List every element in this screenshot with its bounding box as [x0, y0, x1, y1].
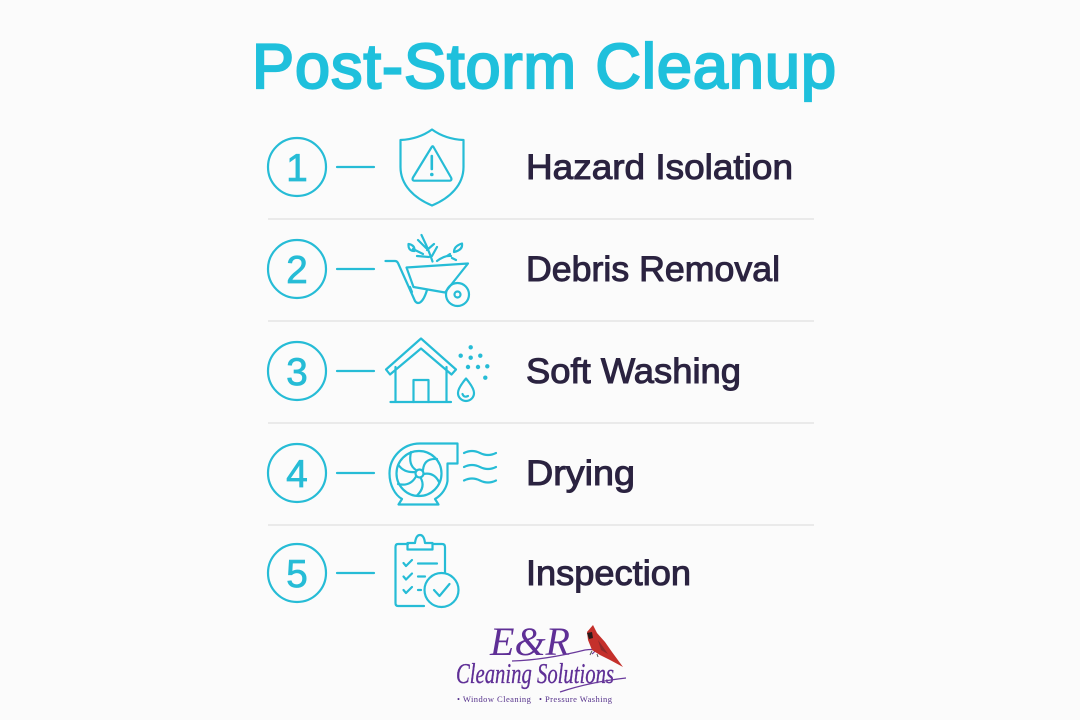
step 1: hazard isolation: 1: [286, 147, 308, 190]
label: Soft Washing: Soft Washing: [526, 352, 741, 391]
step 4: drying: 4: [286, 453, 308, 496]
label: Debris Removal: Debris Removal: [526, 250, 780, 289]
logo: E&R Cleaning Solutions: [456, 619, 626, 704]
step 3: soft washing: 3: [286, 351, 308, 394]
logo wordmark: [456, 619, 614, 690]
logo services line: • Window Cleaning • Pressure Washing: [457, 694, 613, 704]
logo wordmark: E&R: [489, 619, 570, 664]
icon: wheelbarrow with debris: [386, 235, 469, 306]
step 5: inspection: [268, 535, 691, 607]
number badge 3: [268, 342, 374, 400]
number badge 4: [268, 444, 374, 502]
logo wordmark: Cleaning Solutions: [456, 658, 614, 690]
step 1: hazard isolation: [268, 130, 793, 206]
number badge 2: [268, 240, 374, 298]
number badge 1: [268, 138, 374, 196]
step 5: inspection: 5: [286, 553, 308, 596]
label: Hazard Isolation: Hazard Isolation: [526, 148, 793, 187]
icon: air mover fan with waves: [390, 444, 496, 504]
icon: clipboard with check: [396, 535, 458, 607]
label: Drying: Drying: [526, 454, 635, 493]
icon: house with water droplets: [386, 338, 489, 402]
number badge 5: [268, 544, 374, 602]
icon: shield with warning triangle: [400, 130, 464, 206]
step 3: soft washing: [268, 338, 741, 402]
label: Inspection: Inspection: [526, 554, 691, 593]
title: Post-Storm Cleanup: [252, 32, 836, 102]
step 2: debris removal: [268, 235, 780, 306]
icon: red cardinal: [587, 625, 623, 667]
step 4: drying: [268, 444, 635, 504]
step 2: debris removal: 2: [286, 249, 308, 292]
